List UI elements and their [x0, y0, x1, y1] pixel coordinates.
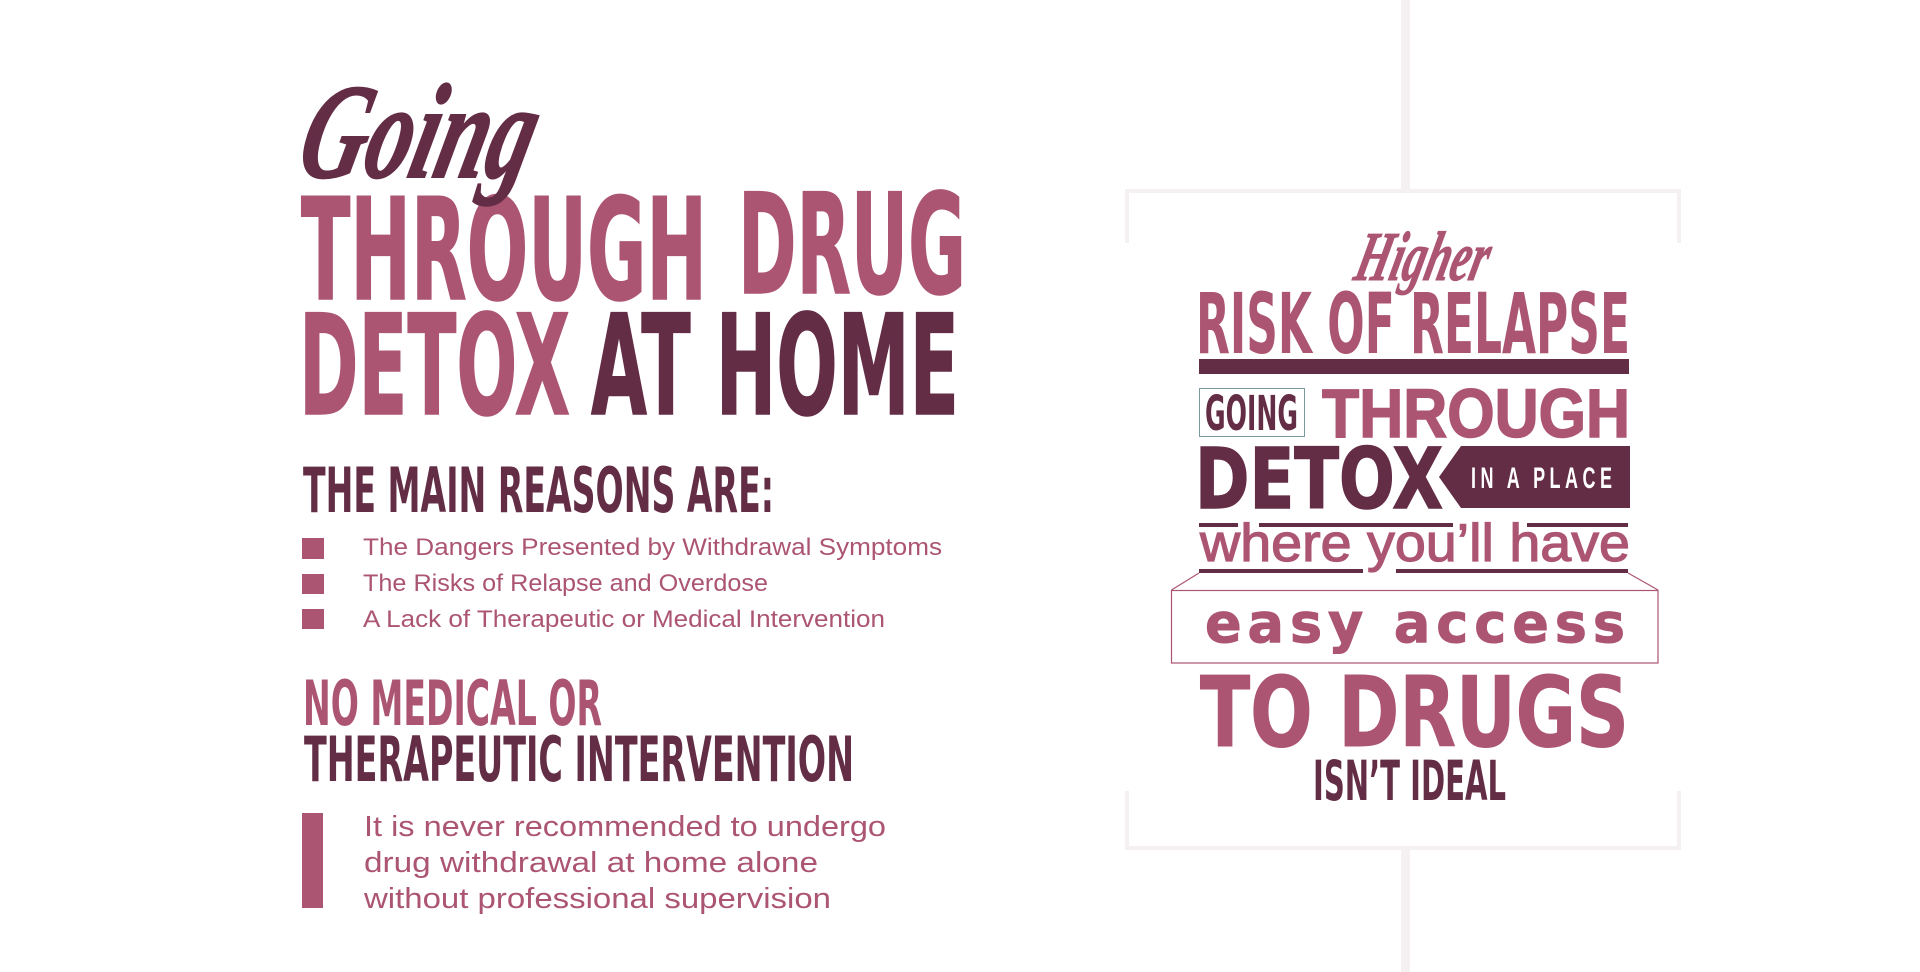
reasons list: [302, 534, 942, 633]
arrow label: in a place: IN A PLACE: [1471, 463, 1612, 495]
main title: [287, 57, 966, 447]
through: THROUGH: [1322, 375, 1630, 452]
heading: no medical or therapeutic intervention: NO MEDICAL OR: [303, 667, 602, 740]
easy access box: easy access: [1205, 592, 1625, 655]
main title: DRUG: [738, 164, 966, 326]
callout paragraph: It is never recommended to undergo: [364, 811, 886, 843]
to drugs: TO DRUGS: [1200, 656, 1629, 769]
easy access box: [1172, 573, 1658, 663]
main title: AT HOME: [591, 285, 959, 447]
reasons list: The Risks of Relapse and Overdose: [363, 570, 768, 597]
main title: DETOX: [299, 285, 570, 447]
going box: GOING: [1205, 386, 1298, 442]
main title: THROUGH: [301, 169, 707, 333]
reasons list: The Dangers Presented by Withdrawal Symptoms: [363, 534, 942, 561]
script: higher: Higher: [1347, 219, 1500, 296]
callout paragraph: drug withdrawal at home alone: [364, 847, 818, 879]
main title: Going: [287, 57, 556, 207]
where you'll have: where you’ll have: [1199, 514, 1630, 573]
going box: [1200, 386, 1304, 442]
heading: no medical or therapeutic intervention: THERAPEUTIC INTERVENTION: [304, 723, 854, 796]
reasons list: A Lack of Therapeutic or Medical Intervention: [363, 606, 885, 633]
heading: the main reasons: THE MAIN REASONS ARE:: [303, 454, 774, 527]
arrow label: in a place: [1439, 446, 1630, 508]
detox: DETOX: [1195, 430, 1443, 528]
panel: higher risk of relapse typographic lockup: [1172, 219, 1658, 813]
divider bar: [1199, 359, 1629, 374]
isn't ideal: ISN’T IDEAL: [1313, 749, 1506, 813]
callout paragraph: without professional supervision: [363, 883, 831, 915]
frame and centre line: [1125, 0, 1681, 972]
callout paragraph: [302, 811, 886, 915]
heading: no medical or therapeutic intervention: [303, 667, 854, 796]
